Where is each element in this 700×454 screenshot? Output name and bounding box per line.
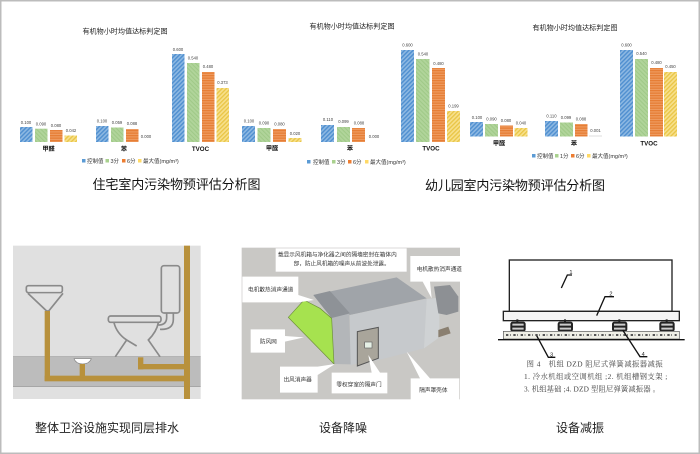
legend: 3分 xyxy=(110,157,120,165)
chart: kindergarten organics xyxy=(242,22,460,166)
callout labels: 出风消声器 xyxy=(284,376,312,384)
concrete foundation xyxy=(498,331,685,340)
caption: equipment noise reduction: 设备降噪 xyxy=(319,421,367,435)
legend: 控制值 xyxy=(313,158,330,166)
legend: 控制值 xyxy=(537,152,554,160)
bars: TVOC: 0.480 xyxy=(203,64,214,69)
heading: kindergarten: 幼儿园室内污染物预评估分析图 xyxy=(425,178,605,193)
legend: 6分 xyxy=(127,157,136,165)
floor slab xyxy=(13,357,201,387)
callout labels: 载显示风机箱与净化器之间的隔墙密封在箱体内 xyxy=(278,251,397,259)
bars: TVOC: 0.450 xyxy=(665,64,676,69)
legend: 最大值(mg/m³) xyxy=(370,158,406,166)
bars: benzene: 0.001 xyxy=(590,128,601,133)
chart title: 有机物小时均值达标判定图 xyxy=(82,26,168,36)
legend xyxy=(82,157,179,165)
caption: equipment vibration reduction: 设备减振 xyxy=(556,421,604,435)
bars: benzene: 0.099 xyxy=(338,119,349,124)
figure caption: 3. 机组基础 ;4. DZD 型阻尼弹簧减振器 。 xyxy=(524,384,660,393)
bars: benzene: 0.059 xyxy=(112,120,123,125)
figure caption xyxy=(524,359,667,393)
channel steel base xyxy=(503,311,679,321)
bars: formaldehyde: 0.080 xyxy=(51,123,62,128)
bars: TVOC: 0.600 xyxy=(402,42,413,48)
bars: benzene: 0.110 xyxy=(546,114,557,118)
bars: formaldehyde: 0.042 xyxy=(66,128,77,133)
bars: formaldehyde: 0.100 xyxy=(472,115,483,120)
bars: formaldehyde: 0.100 xyxy=(21,120,32,125)
bars: TVOC: 0.600 xyxy=(621,42,632,48)
chart: third organics chart xyxy=(470,23,677,160)
part numbers xyxy=(550,270,645,358)
bars: TVOC xyxy=(172,47,229,142)
caption: same-floor drainage: 整体卫浴设施实现同层排水 xyxy=(35,420,179,435)
chart title: 有机物小时均值达标判定图 xyxy=(309,22,395,30)
bars: TVOC: 0.600 xyxy=(173,47,184,52)
bars: benzene: 0.088 xyxy=(576,116,587,122)
category labels: 甲醛 xyxy=(42,145,55,153)
bars: benzene: 0.000 xyxy=(369,134,380,139)
bars: formaldehyde: 0.080 xyxy=(501,118,512,123)
illustration: same-floor drainage xyxy=(13,246,201,399)
bars: TVOC: 0.373 xyxy=(217,80,228,85)
bars: TVOC: 0.540 xyxy=(188,56,199,60)
enclosure body xyxy=(313,277,439,365)
bars: formaldehyde xyxy=(470,115,528,136)
bars: benzene: 0.099 xyxy=(561,115,572,120)
legend: 6分 xyxy=(353,158,362,166)
callout labels: 电机散热消声通道 xyxy=(417,265,462,273)
bars: benzene: 0.088 xyxy=(127,121,138,126)
bars: formaldehyde: 0.080 xyxy=(274,122,285,126)
bars: TVOC: 0.199 xyxy=(448,104,459,108)
bars: formaldehyde: 0.090 xyxy=(486,116,497,122)
category labels xyxy=(42,145,210,153)
spring isolators xyxy=(511,319,674,331)
category labels: TVOC xyxy=(192,146,210,153)
legend xyxy=(532,152,628,160)
category labels: TVOC xyxy=(422,146,440,152)
bars: formaldehyde: 0.040 xyxy=(516,120,527,126)
bars: benzene: 0.088 xyxy=(354,120,365,126)
callout labels: 防风网 xyxy=(260,337,277,345)
bars: TVOC: 0.540 xyxy=(418,52,429,56)
part numbers: 4 xyxy=(642,352,645,358)
part numbers: 3 xyxy=(550,352,553,358)
legend: 控制值 xyxy=(87,157,104,165)
category labels xyxy=(266,144,440,152)
bars: TVOC: 0.480 xyxy=(433,61,444,66)
bars: formaldehyde: 0.090 xyxy=(259,120,270,126)
category labels xyxy=(493,140,658,148)
part numbers: 2 xyxy=(609,292,612,298)
figure caption: 1. 冷水机组或空调机组 ;2. 机组槽钢支架 ; xyxy=(524,372,667,381)
callout labels: 电机散热消声通道 xyxy=(248,285,294,293)
callouts xyxy=(242,248,469,403)
legend: 最大值(mg/m³) xyxy=(143,157,179,165)
bars: TVOC: 0.540 xyxy=(636,51,647,56)
chart: residential organics xyxy=(20,26,229,165)
legend: 最大值(mg/m³) xyxy=(592,152,628,160)
callout labels: 隔声罩壳体 xyxy=(419,386,448,394)
category labels: 苯 xyxy=(571,140,578,148)
bars: formaldehyde xyxy=(20,120,77,142)
bars: benzene xyxy=(96,118,152,142)
bars: TVOC xyxy=(620,42,677,136)
legend: 3分 xyxy=(337,158,346,166)
floor drain xyxy=(74,359,91,364)
bars: benzene: 0.110 xyxy=(323,117,334,122)
icon: wash basin xyxy=(26,286,63,311)
callout labels: 零权穿室的隔声门 xyxy=(336,381,382,389)
machine unit xyxy=(509,260,672,311)
category labels: TVOC xyxy=(640,140,658,148)
legend xyxy=(307,158,406,166)
part numbers: 1 xyxy=(569,270,572,276)
heading: residential: 住宅室内污染物预评估分析图 xyxy=(92,177,260,192)
leader lines xyxy=(537,275,647,357)
callout labels xyxy=(248,251,462,394)
bars: TVOC: 0.480 xyxy=(651,60,662,65)
bars: formaldehyde: 0.090 xyxy=(36,122,47,126)
bars: formaldehyde: 0.100 xyxy=(244,118,255,124)
category labels: 甲醛 xyxy=(266,144,279,152)
figure caption: 图 4 机组 DZD 阻尼式弹簧减振器减振 xyxy=(527,359,663,368)
bars: TVOC xyxy=(401,42,460,142)
bars: benzene xyxy=(545,114,602,136)
motor xyxy=(434,285,458,337)
drainage pipes xyxy=(45,246,190,399)
bars: formaldehyde: 0.020 xyxy=(290,131,301,136)
bars: benzene: 0.100 xyxy=(97,118,108,124)
legend: 1分 xyxy=(560,152,569,160)
illustration: equipment noise enclosure xyxy=(242,248,469,403)
bars: formaldehyde xyxy=(242,118,302,142)
green outlet silencer xyxy=(288,300,334,364)
legend: 6分 xyxy=(576,152,585,160)
bars: benzene: 0.000 xyxy=(141,134,152,139)
category labels: 苯 xyxy=(121,145,128,153)
chart title: 有机物小时均值达标判定图 xyxy=(532,23,618,32)
illustration: damping spring isolator diagram xyxy=(498,260,685,393)
bars: benzene xyxy=(321,117,380,142)
icon: toilet xyxy=(108,266,180,357)
category labels: 苯 xyxy=(347,144,354,152)
access door xyxy=(357,327,378,366)
callout labels: 部，防止风机箱的噪声从前波处泄露。 xyxy=(294,259,390,267)
category labels: 甲醛 xyxy=(493,140,506,148)
